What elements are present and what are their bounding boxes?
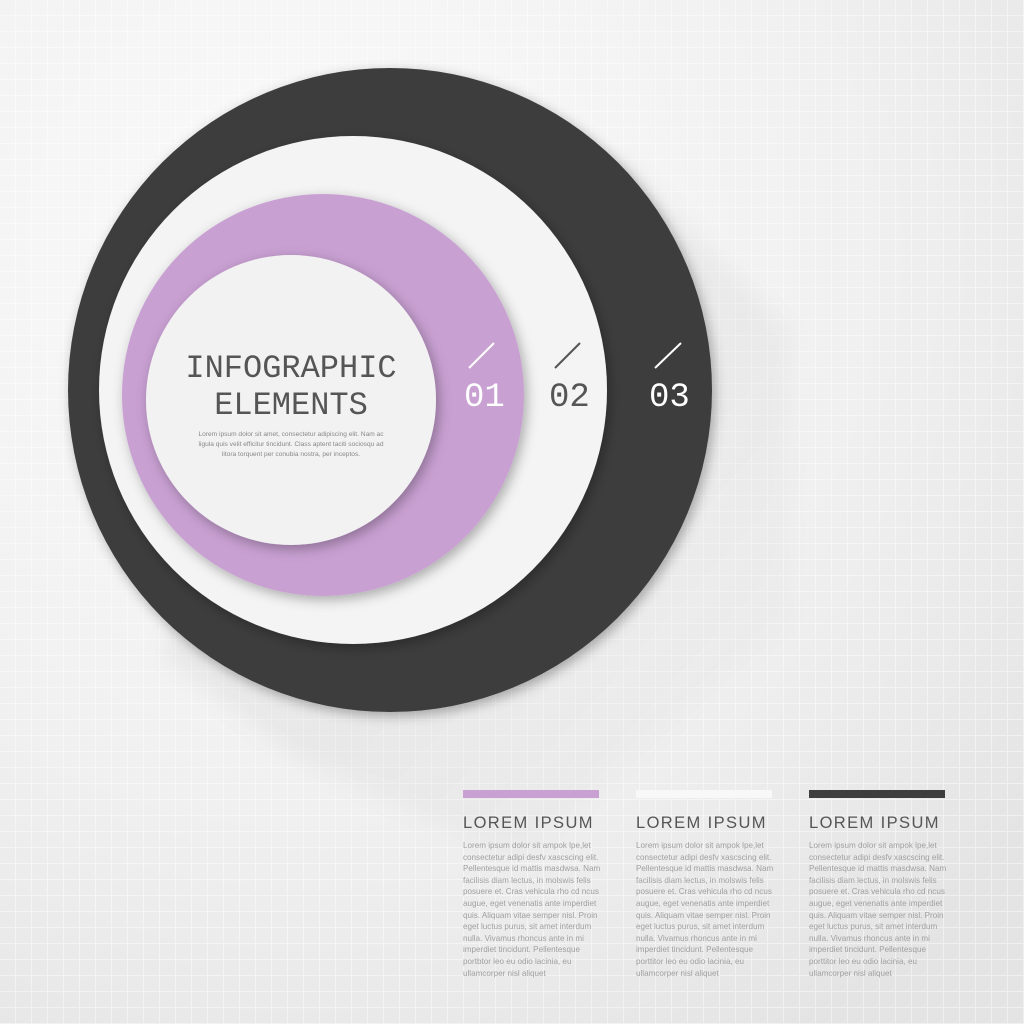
circle 01 purple (122, 194, 524, 596)
label 01 (464, 343, 505, 417)
column 02: Lorem ipsum dolor sit ampok lpe,let consectetur adipi desfv xascscing elit. Pellentesque id mattis masdwsa. Nam facilisis diam lectus, in molswis felis posuere et. Cras vehicula rho cd ncus augue, eget venenatis ante imperdiet quis. Aliquam vitae semper nisl. Proin eget luctus purus, sit amet interdum nulla. Vivamus rhoncus ante in mi imperdiet tincidunt. Pellentesque porttitor leo eu odio lacinia, eu ullamcorper nisl aliquet (636, 841, 773, 978)
label 02: 02 (549, 379, 590, 417)
label 03: 03 (649, 379, 690, 417)
center circle (146, 255, 436, 545)
title: ELEMENTS (214, 387, 368, 424)
title (185, 350, 397, 458)
label 03 (649, 343, 690, 417)
title: INFOGRAPHIC (185, 350, 397, 387)
column 01: Lorem ipsum dolor sit ampok lpe,let consectetur adipi desfv xascscing elit. Pellentesque id mattis masdwsa. Nam facilisis diam lectus, in molswis felis posuere et. Cras vehicula rho cd ncus augue, eget venenatis ante imperdiet quis. Aliquam vitae semper nisl. Proin eget luctus purus, sit amet interdum nulla. Vivamus rhoncus ante in mi imperdiet tincidunt. Pellentesque portbtor leo eu odio lacinia, eu ullamcorper nisl aliquet (463, 841, 600, 978)
column 03: Lorem ipsum dolor sit ampok lpe,let consectetur adipi desfv xascscing elit. Pellentesque id mattis masdwsa. Nam facilisis diam lectus, in molswis felis posuere et. Cras vehicula rho cd ncus augue, eget venenatis ante imperdiet quis. Aliquam vitae semper nisl. Proin eget luctus purus, sit amet interdum nulla. Vivamus rhoncus ante in mi imperdiet tincidunt. Pellentesque porttitor leo eu odio lacinia, eu ullamcorper nisl aliquet (809, 841, 946, 978)
long shadow (160, 160, 790, 860)
column 03: LOREM IPSUM (809, 814, 940, 832)
title: Lorem ipsum dolor sit amet, consectetur adipiscing elit. Nam ac (198, 431, 384, 438)
label 02 (549, 343, 590, 417)
circle 03 dark (68, 68, 712, 712)
title: litora torquent per conubia nostra, per inceptos. (222, 451, 360, 458)
circle 02 white (99, 136, 607, 644)
column 02: LOREM IPSUM (636, 814, 767, 832)
column 01: LOREM IPSUM (463, 814, 594, 832)
label 01: 01 (464, 379, 505, 417)
title: ligula quis velit efficitur tincidunt. Class aptent taciti sociosqu ad (199, 441, 383, 448)
